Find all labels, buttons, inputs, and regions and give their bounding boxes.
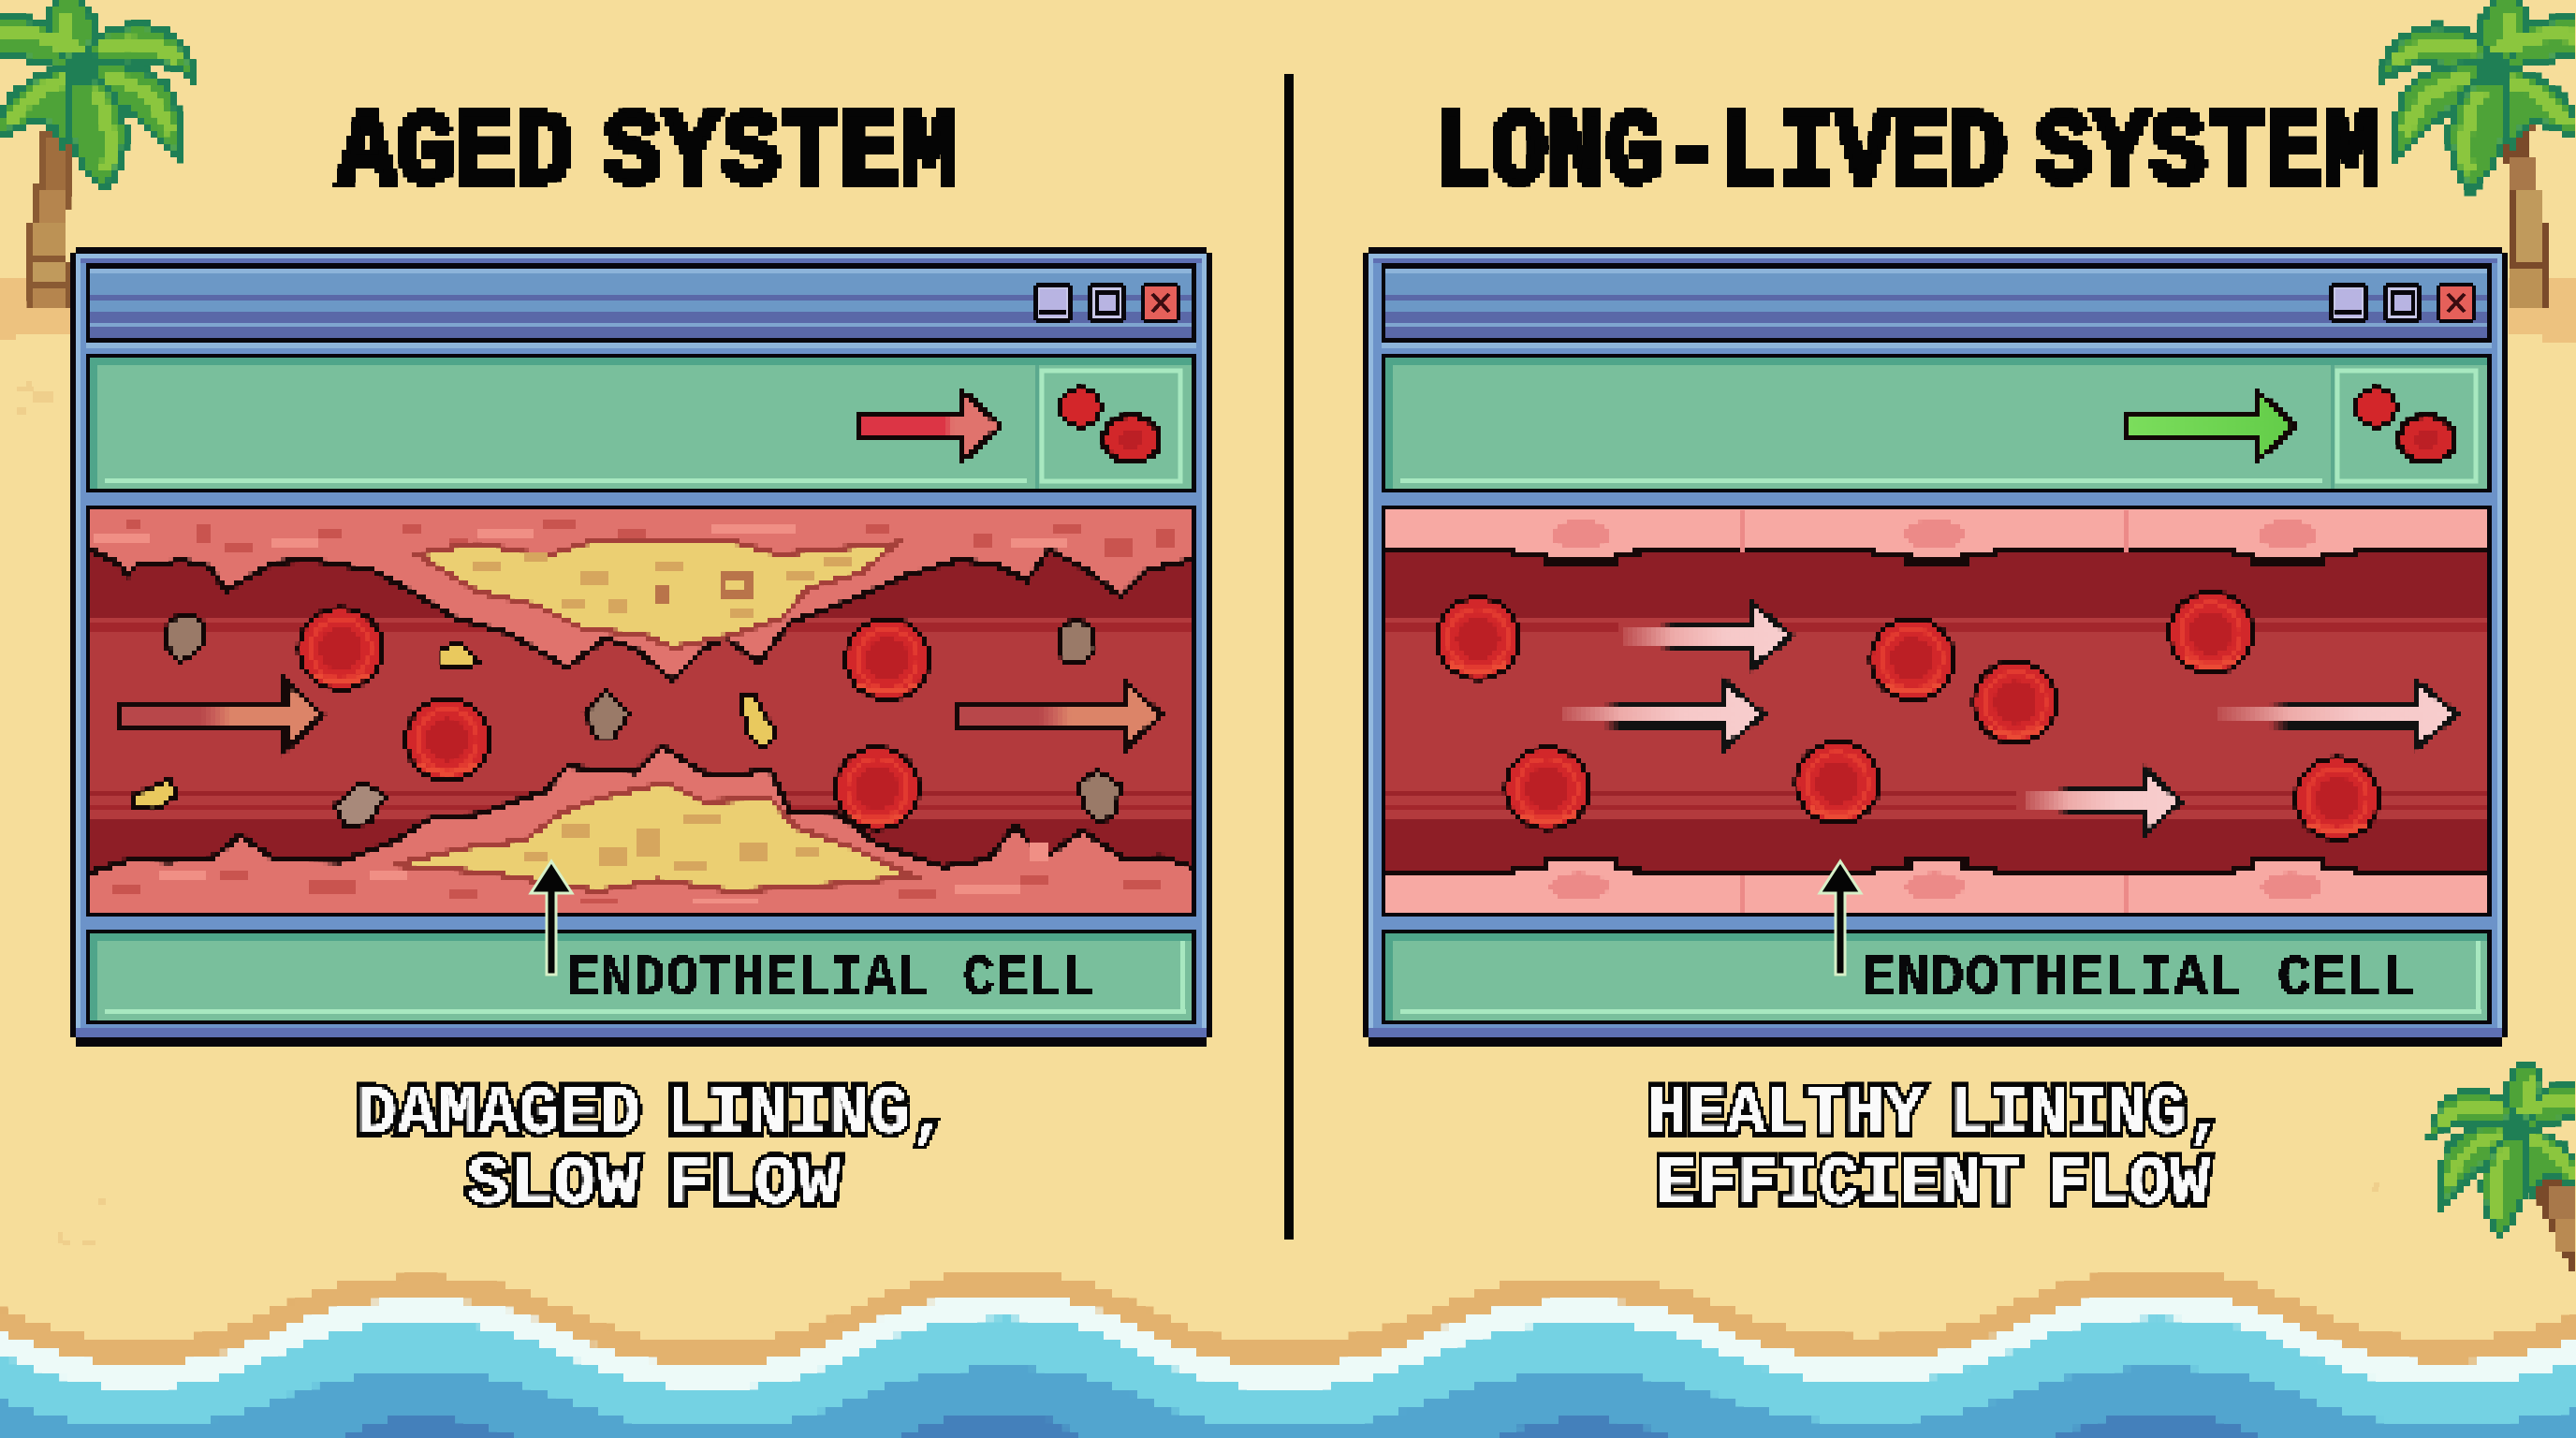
- deep water: [339, 1412, 2262, 1438]
- palm: top left: [0, 0, 193, 311]
- lower plaque: [393, 783, 913, 891]
- lumen: [90, 552, 1192, 871]
- upper plaque: [417, 539, 897, 648]
- arrow: endothelial pointer: [1820, 861, 1861, 975]
- arrow: flow 3: [2217, 681, 2457, 748]
- caption: damaged lining: SLOW FLOW: [466, 1146, 842, 1225]
- center divider: [1284, 74, 1294, 1240]
- vessel frame: [1382, 506, 2492, 917]
- panel: long-lived system window: [1363, 247, 2508, 1047]
- sand patches under palms: [0, 278, 2576, 343]
- caption: damaged lining: [357, 1076, 950, 1225]
- lumen: [1375, 501, 2498, 922]
- title bar: [1382, 263, 2492, 348]
- arrow: endothelial pointer: [531, 861, 572, 975]
- label: endothelial cell: ENDOTHELIAL CELL: [1861, 946, 2416, 1012]
- arrow: flow 4: [2021, 768, 2181, 835]
- upper healthy wall: [1375, 496, 2498, 562]
- icon: blood cells: [2353, 386, 2458, 465]
- bottom green label bar: [1382, 930, 2492, 1024]
- panel: aged system window: [70, 247, 1212, 1047]
- wet sand band: [0, 1271, 2576, 1438]
- caption: healthy lining: HEALTHY LINING,: [1647, 1076, 2226, 1154]
- damaged vessel: [80, 496, 1203, 927]
- debris particles: [133, 613, 1121, 829]
- window buttons: [2329, 283, 2476, 323]
- window frame: [70, 247, 1212, 1047]
- palm: lower right: [2430, 1065, 2576, 1283]
- arrow: flow 2: [1559, 681, 1764, 748]
- top green panel: [86, 354, 1196, 492]
- sand speckles: [17, 381, 2379, 1245]
- title: long-lived system: LONG-LIVED SYSTEM: [1433, 95, 2379, 215]
- beach waves: [0, 1271, 2576, 1438]
- arrow: red slow flow: [859, 391, 1002, 461]
- lower healthy wall: [1375, 859, 2498, 927]
- caption: damaged lining: DAMAGED LINING,: [357, 1076, 950, 1154]
- efficient flow icon: [2127, 386, 2458, 465]
- bottom green label bar: [86, 930, 1196, 1024]
- mid water: [0, 1368, 2576, 1438]
- slow flow icon: [859, 386, 1163, 465]
- icon: blood cells: [1058, 386, 1163, 465]
- red blood cells: [1434, 590, 2381, 842]
- lower damaged wall: [80, 746, 1203, 927]
- window buttons: [1033, 283, 1180, 323]
- healthy vessel: [1375, 496, 2498, 927]
- top green panel: [1382, 354, 2492, 492]
- caption: healthy lining: EFFICIENT FLOW: [1656, 1146, 2211, 1225]
- shallow water: [0, 1318, 2576, 1438]
- foam band: [0, 1295, 2576, 1438]
- title: aged system: AGED SYSTEM: [337, 95, 959, 215]
- vessel frame: [86, 506, 1196, 917]
- title bar: [86, 263, 1196, 348]
- palm: top right: [2382, 0, 2576, 309]
- upper damaged wall: [80, 496, 1203, 681]
- arrow: slow flow left: [120, 681, 323, 750]
- label: endothelial cell: ENDOTHELIAL CELL: [567, 946, 1094, 1012]
- window frame: [1363, 247, 2508, 1047]
- caption: healthy lining: [1647, 1076, 2226, 1225]
- red blood cells: [297, 606, 931, 831]
- arrow: flow 1: [1622, 602, 1792, 669]
- arrow: slow flow right: [959, 681, 1162, 750]
- arrow: green efficient flow: [2127, 391, 2296, 461]
